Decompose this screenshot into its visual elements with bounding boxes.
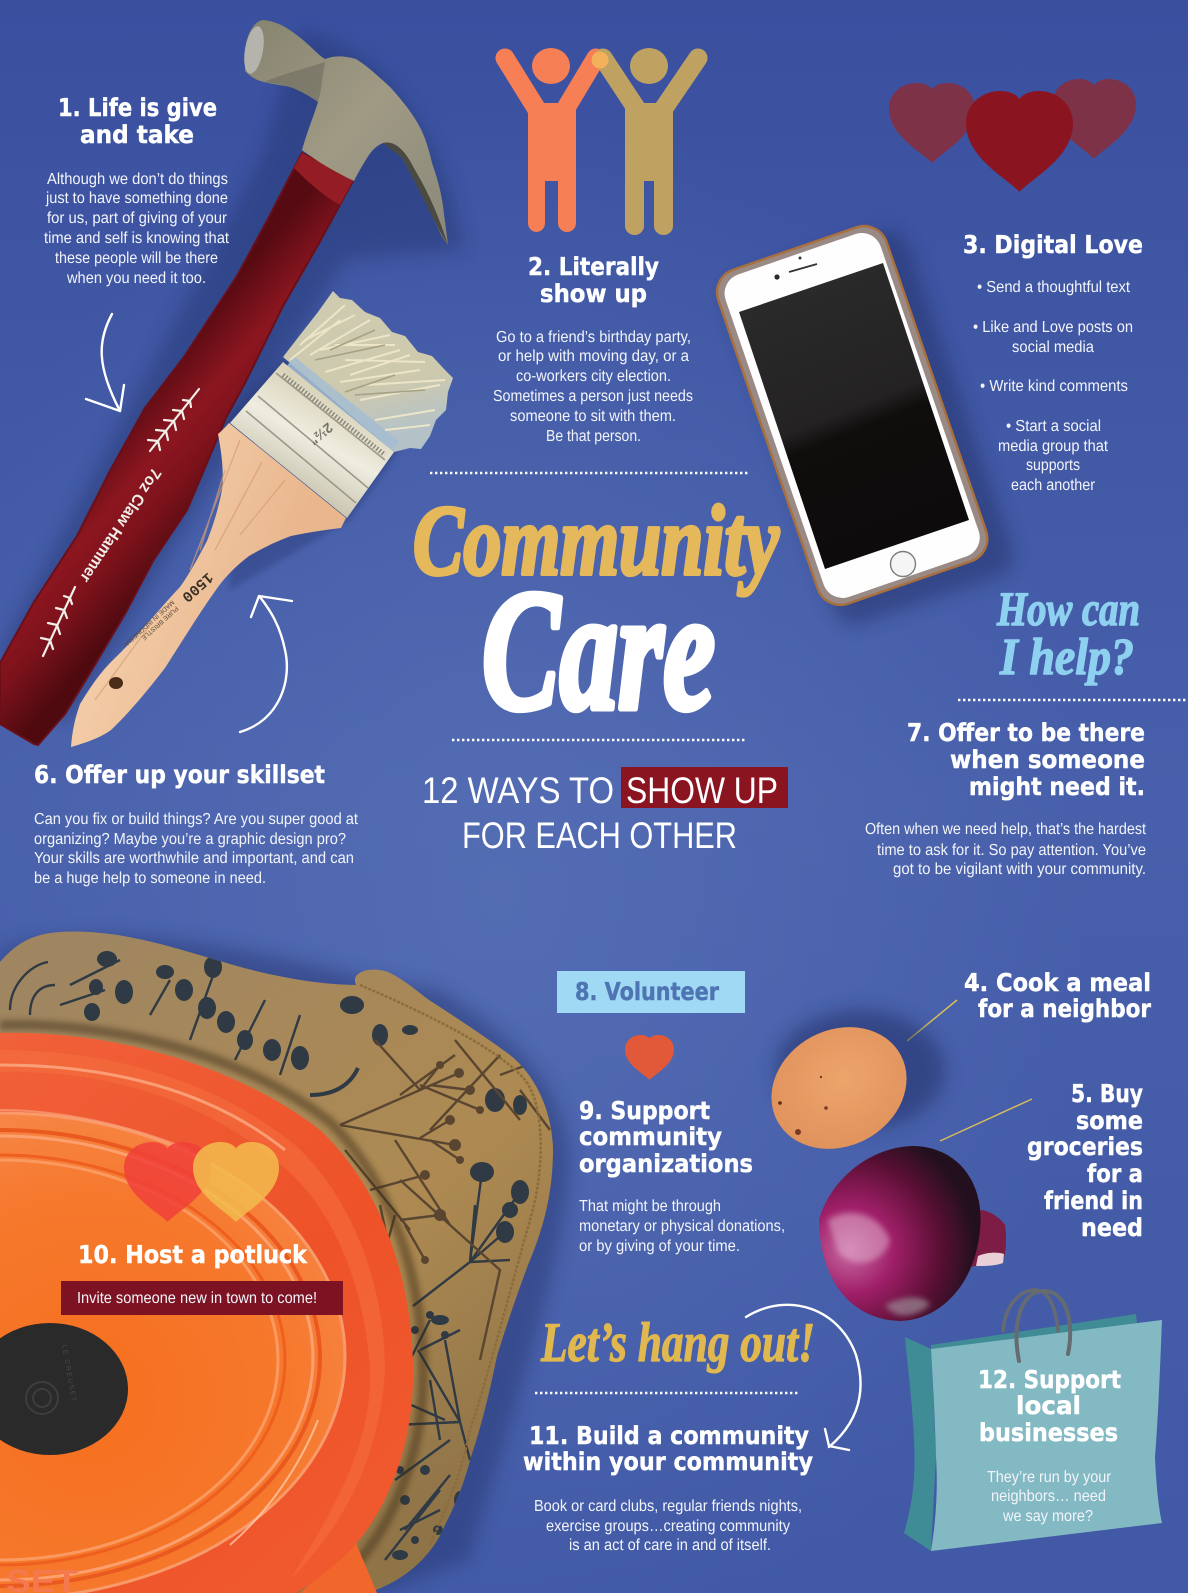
heading 10: 10. Host a potluck [78, 1240, 308, 1269]
text 6: Your skills are worthwhile and important, and can [34, 850, 354, 867]
panel: 4 cook a meal [907, 968, 1152, 1041]
photo: claw hammer [0, 20, 465, 745]
heading 9: organizations [579, 1149, 753, 1178]
panel: 2 literally show up [493, 252, 693, 445]
text 11: Book or card clubs, regular friends nights, [534, 1498, 802, 1515]
text 2: Go to a friend’s birthday party, [496, 329, 691, 346]
text 6 [34, 811, 359, 887]
text 7: time to ask for it. So pay attention. You’ve [877, 842, 1146, 859]
divider above title [430, 472, 749, 474]
photo: paint brush: 2½" [306, 420, 336, 449]
heading 3: 3. Digital Love [963, 230, 1143, 259]
photo: paint brush: MADE IN INDONESIA [122, 599, 175, 647]
list 3: each another [1011, 477, 1096, 494]
script: how can i help: I help? [999, 629, 1134, 686]
heading 2: show up [540, 279, 647, 308]
panel: 10 host a potluck [61, 1240, 343, 1315]
photo: oven mitt [0, 932, 570, 1593]
text 6: Can you fix or build things? Are you super good at [34, 811, 359, 828]
script: how can i help [996, 583, 1140, 686]
heading 12: local [1016, 1391, 1081, 1420]
heading 1: 1. Life is give [58, 93, 217, 122]
heading 9: community [579, 1122, 722, 1151]
photo: egg [750, 1004, 945, 1172]
heading 2 [528, 252, 659, 308]
panel: 5 buy some groceries: need [1081, 1213, 1143, 1242]
text 9: That might be through [579, 1198, 721, 1215]
icon: orange heart [625, 1035, 674, 1080]
arrow: curved to community [746, 1305, 861, 1450]
panel: 4 cook a meal: 4. Cook a meal [964, 968, 1151, 997]
text 2: Be that person. [546, 428, 641, 445]
brush label: 1500 [178, 568, 216, 605]
photo: orange casserole dish [0, 1033, 413, 1593]
text 11: is an act of care in and of itself. [569, 1537, 771, 1554]
photo: paint brush: PURE BRISTLE [139, 605, 179, 642]
label: 8 volunteer [557, 971, 745, 1013]
text 2: someone to sit with them. [510, 408, 676, 425]
heading 12: 12. Support [978, 1365, 1121, 1394]
photo: smartphone [711, 220, 1020, 631]
text 2: or help with moving day, or a [498, 348, 689, 365]
panel: 5 buy some groceries: some [1076, 1106, 1143, 1135]
text 12: we say more? [1002, 1508, 1093, 1525]
panel: 7 offer to be there [865, 718, 1146, 878]
list 3: media group that [998, 438, 1109, 455]
script: let's hang out: Let’s hang out! [540, 1312, 815, 1374]
heading 11 [523, 1421, 813, 1476]
text 2: co-workers city election. [516, 368, 671, 385]
text 12: neighbors… need [991, 1488, 1106, 1505]
text 11 [534, 1498, 802, 1554]
panel: 9 support community organizations [579, 1096, 785, 1255]
label: 8 volunteer: 8. Volunteer [575, 977, 720, 1006]
panel: 12 shopping bag [904, 1290, 1162, 1551]
heading 7: when someone [950, 745, 1145, 774]
photo: paint brush [71, 291, 453, 747]
text 2: Sometimes a person just needs [493, 388, 693, 405]
panel: 3 digital love [963, 230, 1143, 494]
text 1: time and self is knowing that [44, 230, 230, 247]
divider below title [452, 739, 745, 741]
arrow: up to skillset [240, 596, 292, 732]
callout 10 [61, 1281, 343, 1315]
heading 1: and take [80, 120, 194, 149]
panel: 4 cook a meal: for a neighbor [978, 994, 1152, 1023]
text 2 [493, 329, 693, 445]
text 12 [987, 1469, 1112, 1525]
text 7: got to be vigilant with your community. [893, 861, 1146, 878]
text 1 [44, 171, 230, 287]
list 3: • Like and Love posts on [973, 319, 1133, 336]
text 1: for us, part of giving of your [47, 210, 228, 227]
text 7: Often when we need help, that’s the hardest [865, 821, 1146, 838]
text 6: be a huge help to someone in need. [34, 870, 266, 887]
panel: 5 buy some groceries [940, 1079, 1143, 1242]
panel: 5 buy some groceries: friend in [1044, 1186, 1143, 1215]
heading 7 [907, 718, 1145, 801]
text 1: Although we don’t do things [47, 171, 228, 188]
title: Community [413, 485, 779, 596]
panel: 5 buy some groceries: for a [1087, 1159, 1143, 1188]
list 3: • Send a thoughtful text [977, 279, 1131, 296]
heading 9: 9. Support [579, 1096, 710, 1125]
text 9 [579, 1198, 785, 1255]
heading 12 [978, 1365, 1121, 1447]
panel: 5 buy some groceries: groceries [1027, 1132, 1143, 1161]
text 9: or by giving of your time. [579, 1238, 740, 1255]
subtitle [422, 767, 788, 856]
heading 7: might need it. [969, 772, 1145, 801]
list 3 [973, 279, 1133, 494]
text 1: these people will be there [55, 250, 218, 267]
heading 9 [579, 1096, 753, 1178]
list 3: social media [1012, 339, 1094, 356]
title [413, 485, 779, 746]
photo: red onion [819, 1146, 1006, 1321]
list 3: • Write kind comments [980, 378, 1128, 395]
hammer label: 7oz Claw Hammer [76, 465, 164, 585]
knob: LE CREUSET [60, 1344, 77, 1403]
text 1: just to have something done [45, 190, 228, 207]
callout 10: Invite someone new in town to come! [77, 1290, 317, 1307]
title: Care [482, 556, 715, 746]
heading 1 [58, 93, 217, 149]
list 3: supports [1026, 457, 1080, 474]
list 3: • Start a social [1006, 418, 1101, 435]
text 9: monetary or physical donations, [579, 1218, 785, 1235]
heading 12: businesses [979, 1418, 1118, 1447]
text 1: when you need it too. [66, 270, 206, 287]
text 6: organizing? Maybe you’re a graphic design pro? [34, 831, 346, 848]
panel: 11 build a community [523, 1421, 813, 1554]
text 7 [865, 821, 1146, 878]
icon: three hearts [889, 79, 1136, 192]
icon: two overlapping hearts [124, 1142, 279, 1222]
heading 11: within your community [523, 1447, 813, 1476]
panel: 1 life is give and take [44, 93, 230, 287]
arrow: down to brush [86, 314, 124, 411]
panel: 5 buy some groceries: 5. Buy [1071, 1079, 1143, 1108]
heading 11: 11. Build a community [529, 1421, 809, 1450]
text 12: They’re run by your [987, 1469, 1112, 1486]
script: how can i help: How can [996, 583, 1140, 636]
heading 7: 7. Offer to be there [907, 718, 1145, 747]
icon: two people with raised arms [505, 48, 698, 235]
heading 6: 6. Offer up your skillset [34, 760, 325, 789]
bag [904, 1290, 1162, 1551]
knob [0, 1323, 128, 1455]
panel: 6 offer up your skillset [34, 760, 359, 887]
text 11: exercise groups…creating community [546, 1518, 790, 1535]
subtitle: FOR EACH OTHER [462, 815, 737, 856]
heading 2: 2. Literally [528, 252, 659, 281]
highlight: show up: SHOW UP [626, 770, 778, 811]
subtitle: 12 WAYS TO [422, 770, 614, 811]
